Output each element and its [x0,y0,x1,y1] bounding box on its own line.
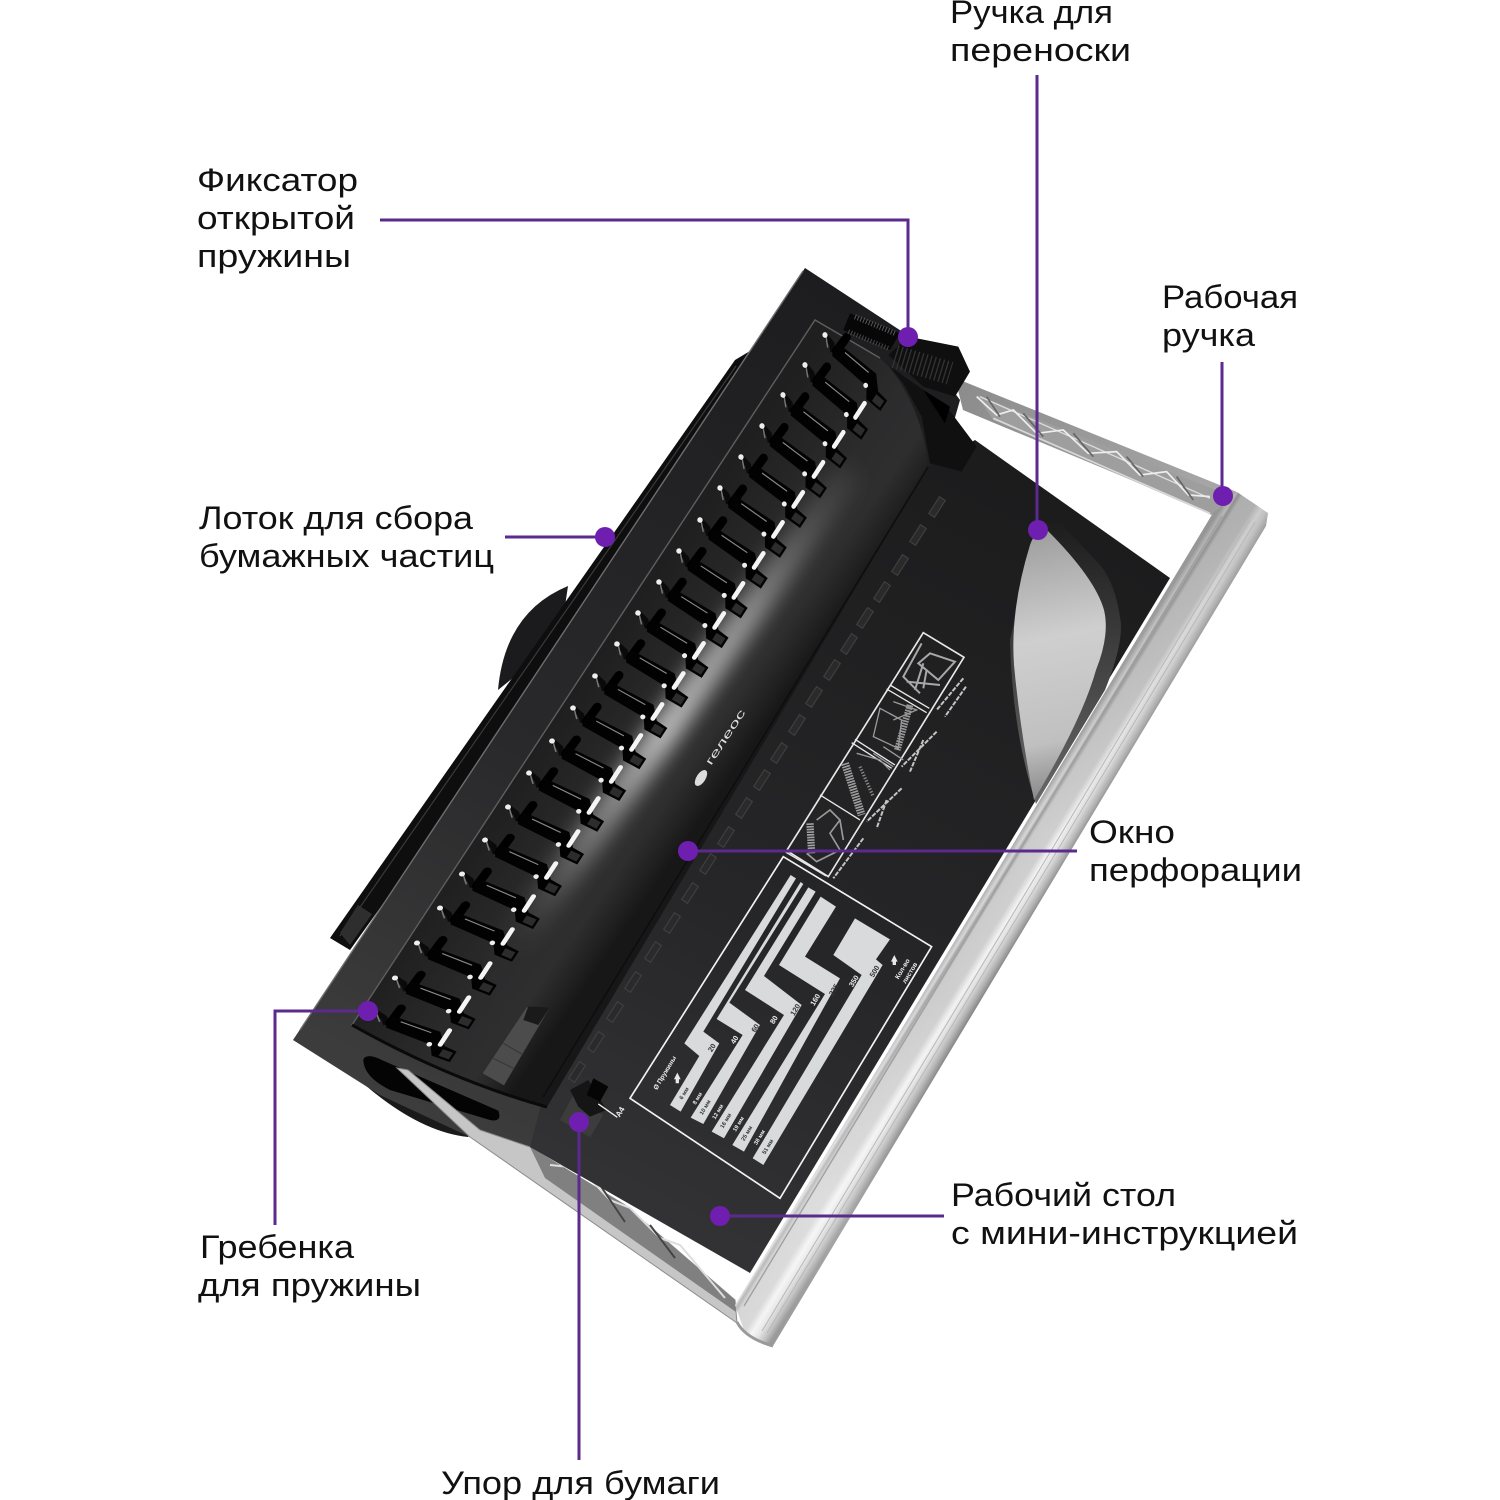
stripe labels: 350 [847,973,861,989]
marker dot [1028,520,1048,540]
paper stop: А4 [614,1105,627,1119]
stripe labels: 225 [827,982,841,997]
capacity stripes [670,875,890,1165]
stripe labels: 19 мм [732,1116,746,1133]
paper stop [560,1078,627,1137]
callout: work table [710,1177,1298,1251]
callout: perforation window [678,814,1302,888]
perforation window ticks [569,497,945,1082]
mini instruction panels [785,633,966,878]
stripe labels [653,958,919,1156]
label text: переноски [950,32,1131,68]
top arm of working handle [955,378,1237,515]
callout: chip tray [199,500,615,574]
stripe labels: 10 мм [699,1099,713,1116]
stripe labels: 40 [729,1034,740,1046]
lower arm of working handle [397,1068,737,1323]
stripe labels: листов [901,961,919,985]
comb housing hump [352,320,928,1107]
device: wire binding machine [293,268,1268,1346]
callout: spring comb [198,1001,421,1303]
leader line [578,1122,580,1460]
stripe labels: 12 мм [712,1104,725,1121]
marker dot [595,527,615,547]
stripe labels: 25 мм [741,1125,754,1142]
label text: Гребенка [200,1229,354,1265]
marker dot [358,1001,378,1021]
slot for handle arm [363,1056,499,1120]
label text: открытой [197,200,355,236]
label text: ручка [1162,317,1255,353]
leader line [1036,75,1038,530]
stripe labels: 38 мм [753,1129,767,1146]
label text: для пружины [198,1267,421,1303]
hump lower lip [352,1025,547,1107]
stripe labels: 500 [867,964,881,979]
lower disc foot [365,1085,510,1137]
label text: Фиксатор [197,162,358,198]
stripe labels: 6 мм [679,1087,691,1101]
marker dot [710,1206,730,1226]
small arrows [674,955,898,1083]
leader line [380,220,908,337]
label text: бумажных частиц [199,538,494,574]
side block on comb housing [483,1007,550,1085]
label text: перфорации [1089,852,1302,888]
callout: spring lock [197,162,918,347]
label text: пружины [197,238,351,274]
stripe labels: 120 [788,1002,802,1017]
working handle bar [735,492,1268,1346]
main body [293,268,960,1147]
paper chip tray [330,345,760,950]
stripe labels: 8 мм [692,1092,704,1106]
leader line [1220,362,1224,496]
label text: с мини-инструкцией [951,1215,1298,1251]
callout: paper stop [441,1112,720,1500]
marker dot [1213,486,1233,506]
marker dot [569,1112,589,1132]
label text: Рабочая [1162,279,1298,315]
brand logo: гелеос [703,707,749,768]
leader line [688,850,1077,852]
comb panel outline [352,320,880,1107]
rear disc foot [498,586,568,690]
label text: Лоток для сбора [199,500,473,536]
label text: Окно [1089,814,1175,850]
stripe labels: 160 [808,992,822,1007]
stripe labels: 16 мм [720,1113,733,1130]
label text: Упор для бумаги [441,1465,720,1500]
leader line [720,1214,944,1218]
stripe labels: 80 [768,1014,780,1026]
callout: working handle [1162,279,1298,506]
hump light reflection [510,470,850,950]
stripe labels: Кол-во [894,958,912,981]
stripe labels: 51 мм [762,1139,775,1156]
callout: carrying handle [950,0,1131,540]
fold line [543,467,928,1097]
table of sheet capacity [630,857,932,1198]
table frame [630,857,932,1198]
leader line [505,536,605,538]
stripe labels: 20 [706,1042,718,1054]
body edge highlight [300,271,803,1030]
stripe labels: 60 [749,1022,761,1034]
marker dot [678,841,698,861]
stripe labels: Ø Пружины [653,1055,678,1091]
spring lock [843,313,977,472]
marker dot [898,327,918,347]
grip recess [1010,515,1121,804]
label text: Рабочий стол [951,1177,1176,1213]
brand logo [692,707,749,788]
work table [530,440,1170,1273]
comb: spring teeth rows [360,323,900,1062]
leader line [275,1011,368,1225]
